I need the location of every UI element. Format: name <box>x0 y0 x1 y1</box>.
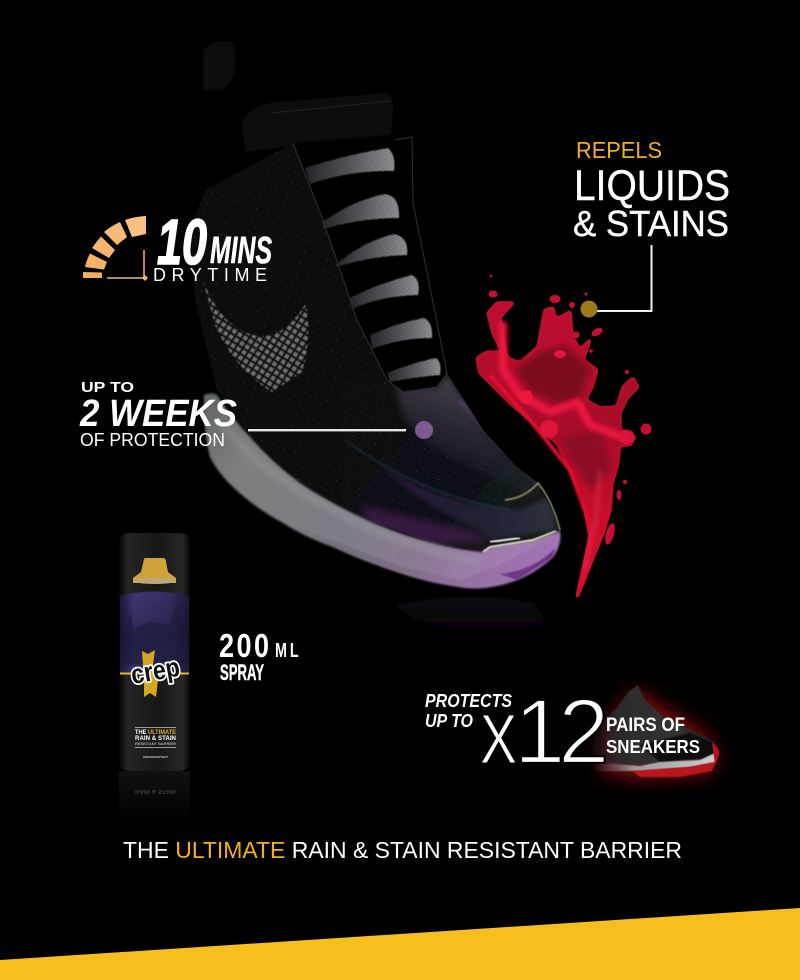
sneaker patent panel <box>640 733 718 762</box>
mini sneaker with red glow <box>585 685 719 780</box>
marker dot <box>415 421 433 439</box>
logo wordmark: crep <box>129 652 182 690</box>
up to label: UP TO <box>81 379 134 396</box>
red liquid splash <box>477 275 652 597</box>
spray label: SPRAY <box>220 660 264 685</box>
yellow footer band <box>0 908 800 980</box>
sneaker upper <box>585 685 718 765</box>
two weeks heading: 2 WEEKS <box>79 393 237 435</box>
swoosh mesh <box>203 280 308 392</box>
ml unit: ML <box>275 639 302 662</box>
repels label: REPELS <box>576 137 662 163</box>
sneaker red outsole <box>632 762 716 777</box>
twelve numeral: 12 <box>514 681 605 783</box>
leader line <box>248 429 406 431</box>
200 numeral: 200 <box>219 629 272 665</box>
splash body <box>477 303 638 597</box>
can tagline: #WEREPROTECT <box>143 755 168 759</box>
drytime label: DRYTIME <box>153 265 267 285</box>
protects label: PROTECTS <box>425 691 512 711</box>
callout: volume <box>219 629 302 685</box>
upper body <box>190 143 560 552</box>
nozzle <box>133 558 176 583</box>
callout: dry time <box>83 206 272 285</box>
callout: two weeks protection <box>79 379 237 450</box>
sneakers label: SNEAKERS <box>606 737 700 757</box>
red glow <box>600 690 718 780</box>
lace row 3 <box>335 234 407 267</box>
can tagline: THE ULTIMATE <box>135 730 176 736</box>
pairs of label: PAIRS OF <box>606 715 685 736</box>
laces <box>305 148 440 382</box>
leader line <box>590 245 652 311</box>
stains heading: & STAINS <box>573 203 729 244</box>
purple label band <box>120 592 189 673</box>
callout: repels liquids and stains <box>573 137 730 244</box>
eyestay outline <box>293 137 447 392</box>
lace row 4 <box>349 275 419 309</box>
lace row 1 <box>305 148 394 184</box>
crep logo <box>129 650 182 697</box>
x multiplier: X <box>480 700 517 778</box>
midsole highlight <box>222 425 480 562</box>
collar strap <box>242 93 393 152</box>
spray can reflection <box>119 771 190 822</box>
can tagline <box>135 727 176 759</box>
outsole edge <box>283 523 558 588</box>
sneaker midsole <box>590 752 717 771</box>
of protection label: OF PROTECTION <box>80 430 225 450</box>
icon: gauge <box>83 216 148 281</box>
toe cap rim <box>505 483 560 530</box>
lace row 5 <box>370 318 432 349</box>
shoe reflection <box>395 597 545 668</box>
knit texture and vamp lighting <box>185 140 565 560</box>
pull tab <box>203 41 236 92</box>
connector: protection <box>248 421 433 439</box>
strap stitch <box>272 101 391 113</box>
connector: liquids <box>580 245 652 318</box>
10 numeral: 10 <box>157 206 207 278</box>
sneaker illustration <box>180 41 565 588</box>
spray can reflection: RAIN & STAIN <box>135 788 176 794</box>
product: spray can <box>119 533 190 771</box>
can tagline: RESISTANT BARRIER <box>135 741 176 746</box>
midsole <box>204 394 560 588</box>
marker dot <box>580 300 598 318</box>
collar left <box>180 90 268 180</box>
splash dark centre <box>515 345 590 405</box>
can body <box>119 533 190 771</box>
splash trailing streak <box>490 375 592 585</box>
lace row 6 <box>387 358 440 382</box>
castle silhouette <box>124 602 188 665</box>
liquids heading: LIQUIDS <box>574 162 730 210</box>
splash droplets <box>488 275 652 546</box>
lace row 2 <box>322 194 399 229</box>
can tagline: RAIN & STAIN <box>135 736 176 742</box>
splash bright ribbon <box>503 325 622 437</box>
toe bumper shine <box>483 531 556 552</box>
callout: protects twelve pairs <box>425 681 700 783</box>
upper shadow fill <box>190 135 447 470</box>
up to label: UP TO <box>425 711 473 731</box>
logo star <box>142 650 158 697</box>
tagline: THE ULTIMATE RAIN & STAIN RESISTANT BARRIER <box>123 837 682 863</box>
mins label: MINS <box>210 230 272 272</box>
yellow stripe <box>120 672 189 674</box>
